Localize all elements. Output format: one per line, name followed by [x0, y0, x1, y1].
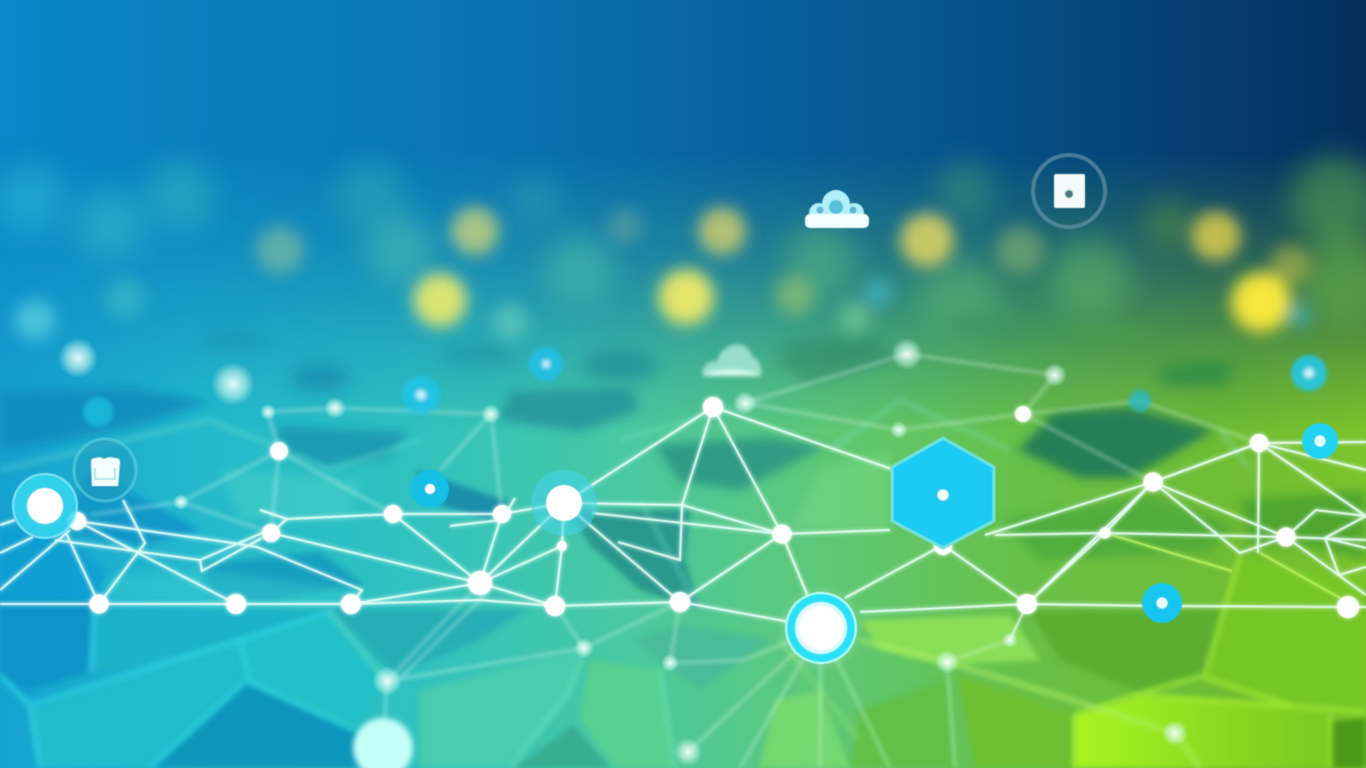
bokeh lights: [15, 207, 1314, 340]
blurred far mesh haze: [0, 156, 1366, 340]
cyan dot node centre-left: [411, 470, 449, 508]
sharper dark mesh facets: [0, 470, 700, 610]
light mesh facets upper: [100, 450, 890, 604]
mottled dark patches of mid band: [201, 313, 1233, 392]
cyan dot node lower right: [1142, 583, 1182, 623]
cyan dot node right: [1302, 423, 1338, 459]
white network nodes: [68, 397, 1359, 618]
bright blurred foreground node: [353, 718, 413, 768]
icon: cloud sharp: [805, 190, 869, 228]
lower facets left: [0, 600, 770, 768]
icon: cloud blurred: [702, 344, 761, 376]
sharp network lines: [0, 407, 1366, 640]
ringed node centre: [531, 470, 597, 536]
icon: ring with square: [1033, 155, 1105, 227]
large ringed node left: [13, 474, 77, 538]
glowing focus node: [777, 584, 865, 672]
soft background network lines: [90, 354, 1259, 768]
blurred cyan nodes: [83, 347, 1327, 427]
dark mesh facets: [0, 338, 1366, 560]
hexagon node: [892, 438, 994, 548]
soft glowing facet edges: [0, 400, 1366, 768]
blurred glow nodes: [58, 338, 1188, 766]
lower facets right: [760, 555, 1366, 768]
icon: gift box in ring: [74, 439, 136, 501]
